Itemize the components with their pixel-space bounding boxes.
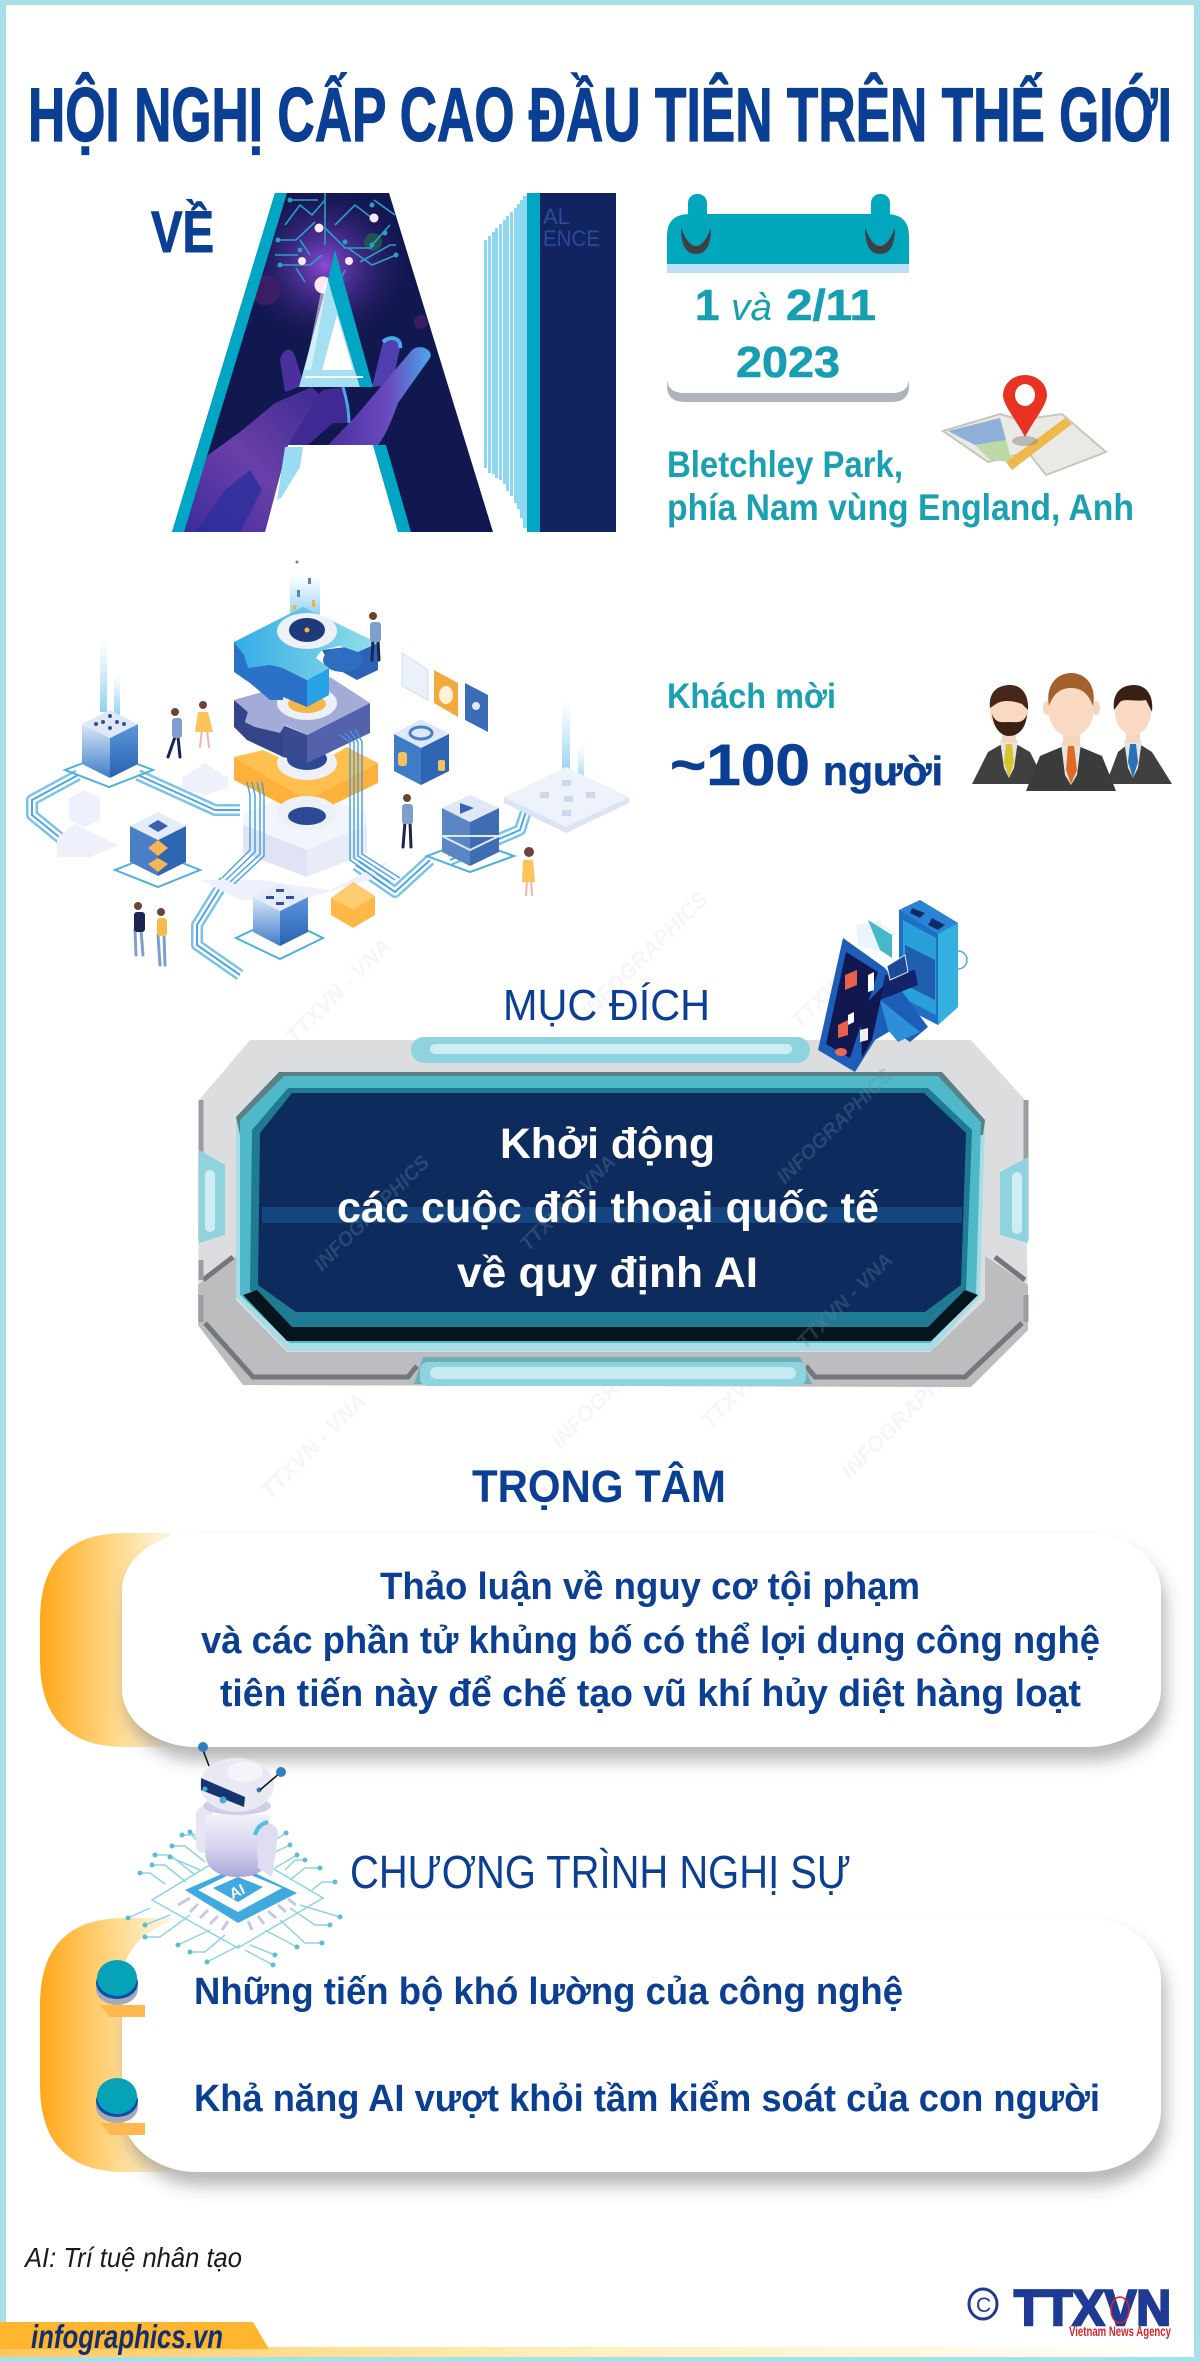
- watermark on screen: TTXVN - VNA: [516, 1151, 620, 1256]
- panel: agenda: [40, 1918, 1161, 2172]
- hand: [172, 387, 322, 532]
- watermarks: INFOGRAPHICS: [576, 886, 713, 1024]
- guests count: người: [823, 748, 943, 794]
- date text: 2/11: [786, 281, 876, 330]
- calendar header: [667, 214, 909, 264]
- watermark on screen: [310, 1064, 897, 1354]
- frame dark edges: [203, 1257, 1025, 1377]
- calendar shadow: [667, 350, 909, 402]
- logo: TTXVN: TTXVN: [1014, 2280, 1171, 2336]
- focus text: Thảo luận về nguy cơ tội phạm: [380, 1566, 920, 1608]
- bottom tab: [414, 1357, 812, 1384]
- guests label: Khách mời: [667, 677, 836, 716]
- right person: [1106, 685, 1172, 784]
- robot left arm: [196, 1807, 212, 1853]
- watermarks: TTXVN - VNA: [786, 918, 901, 1034]
- cyan edges of A: [172, 193, 287, 532]
- letter A: [172, 185, 493, 532]
- white card: [122, 1918, 1161, 2172]
- icon: three guests: [972, 673, 1172, 791]
- metal frame: [198, 1040, 1028, 1387]
- right side tab: [1000, 1157, 1028, 1243]
- agenda text: Khả năng AI vượt khỏi tầm kiểm soát của con người: [194, 2078, 1100, 2120]
- A counter triangle: [299, 280, 360, 387]
- watermark on screen: INFOGRAPHICS: [310, 1151, 434, 1276]
- focus text: [201, 1566, 1100, 1715]
- robot body: [205, 1815, 270, 1877]
- watermarks: INFOGRAPHICS: [546, 1316, 683, 1454]
- purpose text: các cuộc đối thoại quốc tế: [337, 1184, 879, 1232]
- orange back tab: [40, 1533, 170, 1747]
- slate puzzle block: [234, 677, 370, 780]
- calendar: date: [667, 194, 909, 402]
- monitor: [887, 955, 908, 980]
- icon: map with pin: [943, 375, 1106, 475]
- footer band: [0, 2322, 1200, 2362]
- teal screen border: [236, 1072, 985, 1351]
- icon: robot on AI chip: AI: [227, 1881, 248, 1903]
- top tab: [411, 1037, 810, 1063]
- lower frame shading: [198, 1256, 1028, 1387]
- letter A: [818, 938, 928, 1072]
- footnote: AI: Trí tuệ nhân tạo: [23, 2242, 242, 2273]
- falling particles: [293, 560, 315, 610]
- robot antennae: [203, 1750, 281, 1790]
- icon: robot on AI chip: [126, 1742, 342, 1968]
- guests count: [670, 733, 943, 798]
- heading: CHƯƠNG TRÌNH NGHỊ SỰ: CHƯƠNG TRÌNH NGHỊ SỰ: [350, 1846, 851, 1898]
- footer site name: infographics.vn: [31, 2318, 223, 2355]
- white base block: [200, 790, 390, 900]
- watermark on screen: INFOGRAPHICS: [773, 1064, 897, 1189]
- people: [134, 612, 535, 965]
- purpose text: về quy định AI: [457, 1249, 758, 1297]
- chip: [185, 1866, 297, 1923]
- circuit board: [128, 1832, 340, 1965]
- date text: [695, 281, 876, 330]
- circuit traces: [32, 775, 528, 975]
- logo: TTXVN: C: [976, 2294, 991, 2317]
- robot head: [203, 1797, 271, 1815]
- server D: [394, 720, 449, 785]
- server A: [65, 710, 153, 787]
- year text: 2023: [736, 338, 840, 387]
- wires from blocks: [222, 729, 400, 885]
- location text: phía Nam vùng England, Anh: [667, 487, 1134, 528]
- white plate: [504, 767, 629, 833]
- panel: purpose screen frame: [198, 1037, 1028, 1387]
- letter I with page stack: ENCE: [543, 226, 600, 251]
- orange block: [234, 747, 378, 830]
- purpose text: [337, 1120, 879, 1297]
- agenda text: Những tiến bộ khó lường của công nghệ: [194, 1971, 903, 2013]
- purpose text: Khởi động: [500, 1120, 715, 1168]
- focus text: tiên tiến này để chế tạo vũ khí hủy diệt hàng loạt: [220, 1673, 1081, 1715]
- watermarks: [256, 886, 973, 1504]
- bullet 1: [96, 1960, 145, 2017]
- watermarks: INFOGRAPHICS: [836, 1346, 973, 1484]
- watermark on screen: TTXVN - VNA: [793, 1249, 897, 1354]
- letter I with page stack: [484, 193, 616, 532]
- bullet 2: [96, 2078, 145, 2135]
- calendar body: [667, 273, 909, 393]
- focus text: và các phần tử khủng bố có thể lợi dụng công nghệ: [201, 1620, 1100, 1662]
- letter I with page stack: AL: [543, 204, 570, 229]
- light beams: [100, 575, 584, 785]
- isometric illustration: AI infrastructure: [32, 560, 629, 975]
- small orange box: [331, 882, 375, 928]
- left person: [972, 685, 1046, 784]
- colored items: [845, 970, 857, 990]
- watermarks: TTXVN - VNA: [256, 1388, 371, 1504]
- middle person: [1026, 673, 1116, 791]
- server E: [427, 795, 514, 872]
- date text: và: [731, 287, 772, 329]
- date text: 1: [695, 281, 719, 330]
- guests count: ~100: [670, 733, 810, 798]
- light cubes: [57, 763, 228, 857]
- big letters AI: [172, 185, 616, 532]
- agenda text: [194, 1971, 1100, 2120]
- heading: TRỌNG TÂM: TRỌNG TÂM: [472, 1461, 726, 1512]
- title word: về: VỀ: [151, 200, 214, 265]
- robot right arm: [257, 1823, 278, 1877]
- server C: [236, 883, 323, 959]
- white card: [122, 1533, 1161, 1747]
- watermarks: TTXVN - VNA: [696, 1318, 811, 1434]
- icon: isometric AI letters: [818, 900, 967, 1072]
- floating cards: [402, 653, 488, 732]
- letter I: [899, 900, 958, 1025]
- location text: Bletchley Park,: [667, 444, 903, 485]
- watermarks: TTXVN - VNA: [281, 933, 396, 1049]
- navy screen: [258, 1093, 966, 1312]
- doc card: [856, 920, 892, 955]
- blue puzzle block: [234, 607, 378, 707]
- left side tab: [199, 1150, 225, 1243]
- location text: [667, 444, 1134, 528]
- calendar rings: [681, 228, 711, 254]
- heading: MỤC ĐÍCH: MỤC ĐÍCH: [503, 981, 710, 1030]
- chip pins: [178, 1898, 296, 1930]
- panel: focus: [40, 1533, 1161, 1747]
- eye ring on top: [277, 613, 337, 649]
- orange back tab: [40, 1918, 170, 2172]
- server B: [115, 812, 200, 887]
